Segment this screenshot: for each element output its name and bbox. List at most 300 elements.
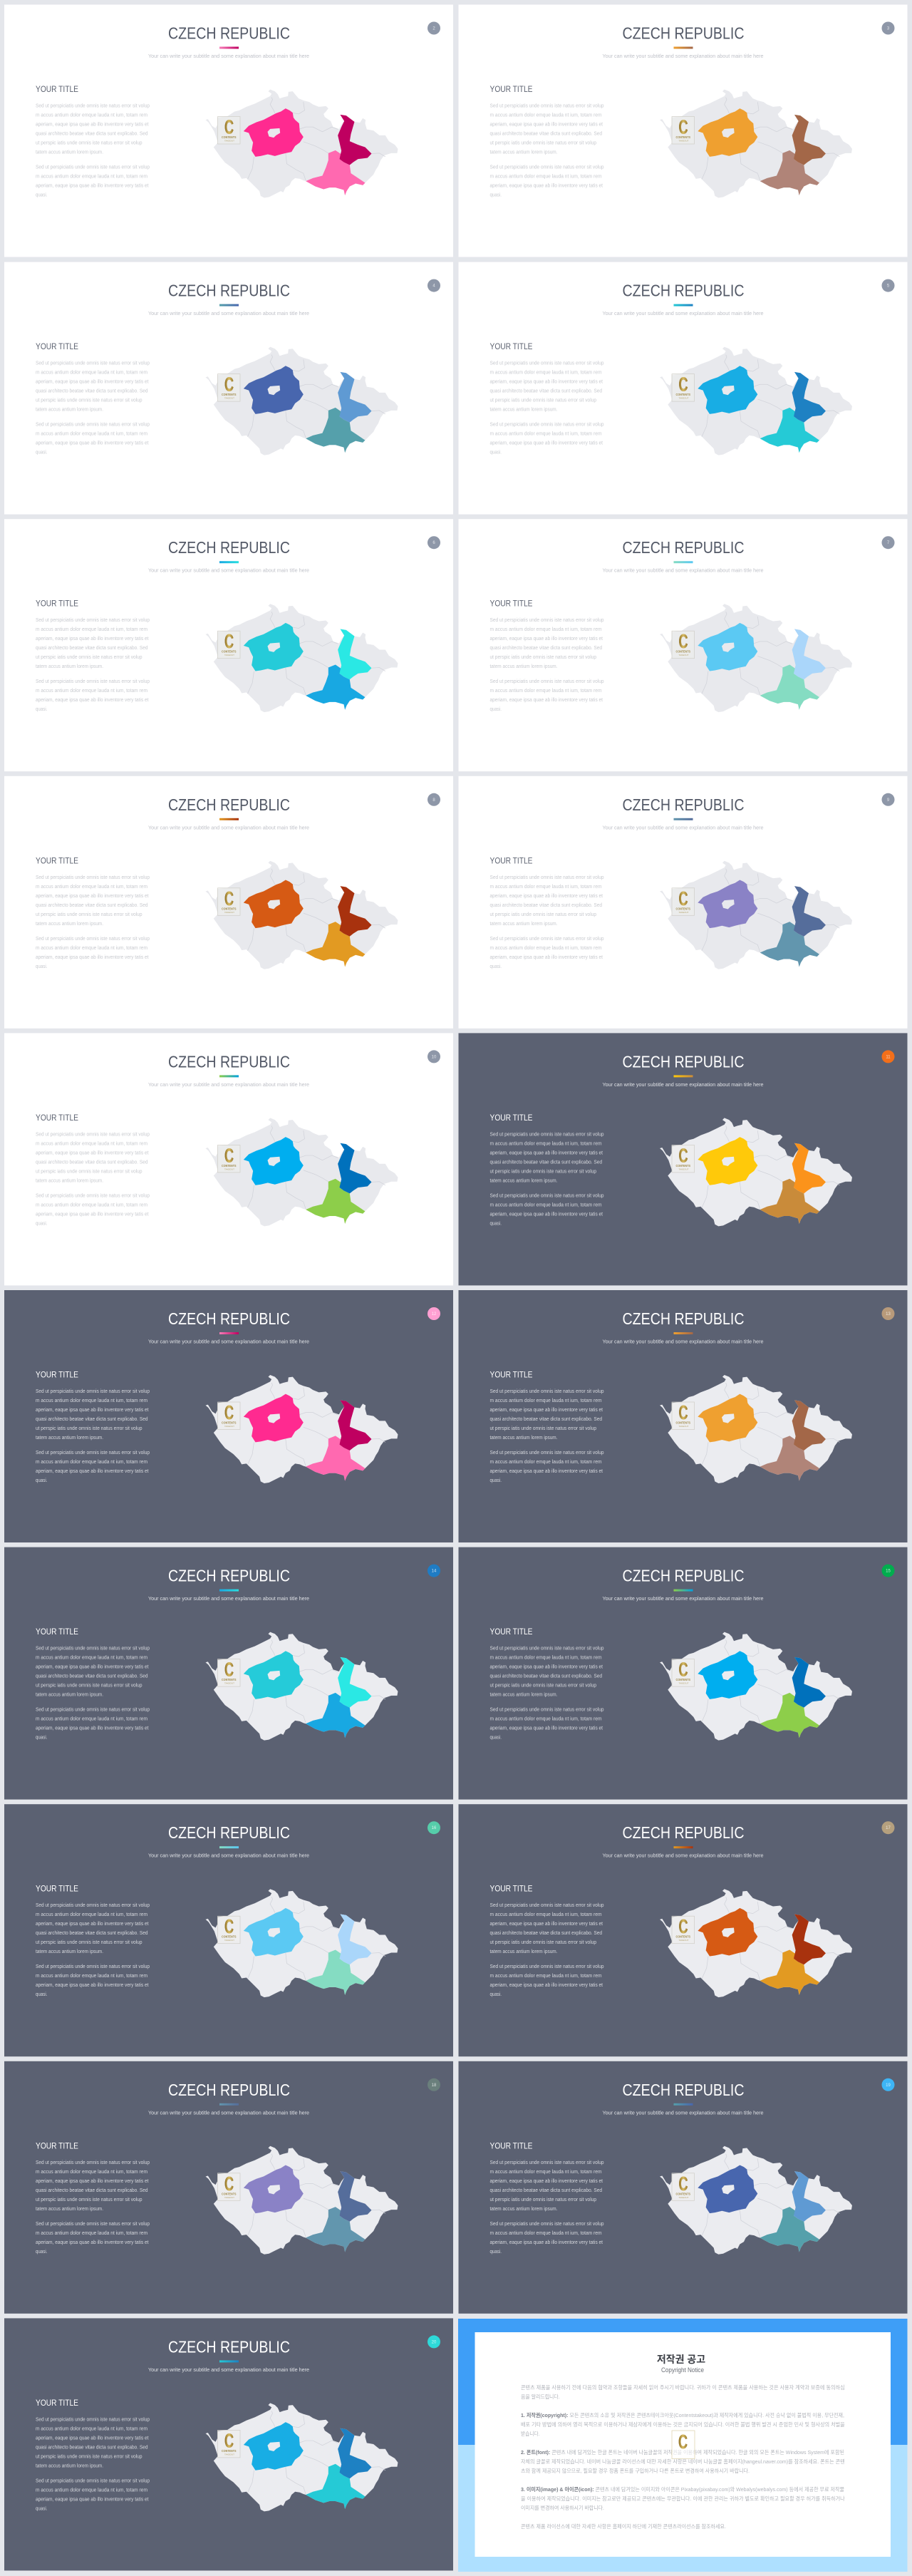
panel: slide 1 pink bbox=[4, 4, 453, 257]
title underline bbox=[219, 1332, 239, 1334]
body text: quasi architecto beatae vitae dicta sunt explicabo. Sed bbox=[36, 1160, 148, 1165]
logo bbox=[218, 1401, 240, 1430]
body text: quasi. bbox=[36, 1992, 48, 1997]
page number badge: 3 bbox=[887, 27, 890, 31]
logo: C bbox=[224, 630, 234, 652]
body text: tatem accus antium lorem ipsum. bbox=[490, 2207, 558, 2212]
body text: Sed ut perspiciatis unde omnis iste natus error sit volup bbox=[36, 618, 150, 623]
body text: quasi. bbox=[36, 2506, 48, 2511]
subtitle: Your can write your subtitle and some explanation about main title here bbox=[148, 53, 309, 59]
page number badge: 8 bbox=[432, 798, 435, 803]
logo: CONTENTS bbox=[675, 650, 690, 654]
body text: Sed ut perspiciatis unde omnis iste natus error sit volup bbox=[490, 361, 604, 366]
title underline bbox=[219, 561, 239, 563]
body text: aperiam, eaque ipsa quae ab illo inventore very tatis et bbox=[36, 1150, 149, 1155]
map bbox=[205, 2403, 398, 2511]
body text: tatem accus antium lorem ipsum. bbox=[36, 2463, 103, 2468]
body text bbox=[490, 1389, 604, 1483]
logo: TAKEOUT bbox=[678, 1939, 689, 1942]
heading: YOUR TITLE bbox=[490, 1885, 533, 1894]
body text: aperiam, eaque ipsa quae ab illo inventore very tatis et bbox=[490, 1726, 603, 1731]
body text: Sed ut perspiciatis unde omnis iste natus error sit volup bbox=[36, 2222, 150, 2227]
subtitle: Your can write your subtitle and some explanation about main title here bbox=[148, 310, 309, 316]
page number badge bbox=[882, 1821, 895, 1834]
logo bbox=[672, 2173, 694, 2200]
title: CZECH REPUBLIC bbox=[168, 538, 290, 557]
logo: TAKEOUT bbox=[224, 1425, 234, 1428]
logo: C bbox=[678, 887, 688, 910]
body text: quasi architecto beatae vitae dicta sunt explicabo. Sed bbox=[36, 1931, 148, 1936]
body text: Sed ut perspiciatis unde omnis iste natus error sit volup bbox=[490, 618, 604, 623]
heading: YOUR TITLE bbox=[36, 600, 78, 609]
body text: m accus antium dolor emque lauda nt ium, totam rem bbox=[36, 2170, 147, 2175]
body text: tatem accus antium lorem ipsum. bbox=[490, 408, 558, 413]
body text: aperiam, eaque ipsa quae ab illo inventore very tatis et bbox=[36, 441, 149, 446]
logo bbox=[672, 1144, 694, 1173]
body text: Sed ut perspiciatis unde omnis iste natus error sit volup bbox=[36, 2478, 150, 2483]
body text: quasi. bbox=[490, 964, 502, 969]
title: CZECH REPUBLIC bbox=[623, 1309, 745, 1328]
body text: quasi architecto beatae vitae dicta sunt explicabo. Sed bbox=[490, 1160, 602, 1165]
page number badge bbox=[882, 536, 895, 549]
body text: m accus antium dolor emque lauda nt ium, totam rem bbox=[490, 2231, 602, 2236]
body text: ut perspic iatis unde omnis iste natus error sit volup bbox=[490, 912, 596, 917]
logo: TAKEOUT bbox=[678, 397, 689, 400]
body text: aperiam, eaque ipsa quae ab illo inventore very tatis et bbox=[490, 2179, 603, 2184]
page number badge bbox=[428, 1050, 440, 1063]
body text: m accus antium dolor emque lauda nt ium, totam rem bbox=[36, 1398, 147, 1403]
map bbox=[660, 1118, 852, 1226]
logo: CONTENTS bbox=[675, 1935, 690, 1939]
body text: Sed ut perspiciatis unde omnis iste natus error sit volup bbox=[490, 1389, 604, 1394]
body text: quasi. bbox=[490, 192, 502, 198]
heading: YOUR TITLE bbox=[36, 1371, 78, 1380]
subtitle: Your can write your subtitle and some explanation about main title here bbox=[603, 824, 764, 830]
map bbox=[205, 1118, 398, 1226]
logo: CONTENTS bbox=[222, 1421, 237, 1424]
body text: quasi architecto beatae vitae dicta sunt explicabo. Sed bbox=[36, 1674, 148, 1679]
body text: Sed ut perspiciatis unde omnis iste natus error sit volup bbox=[36, 2417, 150, 2422]
subtitle: Your can write your subtitle and some explanation about main title here bbox=[603, 1339, 764, 1344]
body text: aperiam, eaque ipsa quae ab illo inventore very tatis et bbox=[36, 2240, 149, 2245]
logo: CONTENTS bbox=[675, 907, 690, 910]
body text bbox=[36, 1647, 150, 1741]
notice body text: 받습니다. bbox=[521, 2431, 540, 2437]
subtitle: Your can write your subtitle and some explanation about main title here bbox=[148, 1081, 309, 1088]
body text: Sed ut perspiciatis unde omnis iste natus error sit volup bbox=[490, 875, 604, 880]
title: CZECH REPUBLIC bbox=[168, 1567, 290, 1585]
body text: quasi architecto beatae vitae dicta sunt explicabo. Sed bbox=[490, 1931, 602, 1936]
panel: slide 18 dark blue bbox=[459, 2061, 908, 2314]
title underline bbox=[674, 561, 693, 563]
title underline bbox=[219, 1075, 239, 1077]
logo bbox=[672, 2431, 695, 2459]
subtitle: Your can write your subtitle and some explanation about main title here bbox=[603, 2109, 764, 2116]
body text: Sed ut perspiciatis unde omnis iste natus error sit volup bbox=[36, 165, 150, 170]
map bbox=[660, 1375, 852, 1483]
notice body text: 2. 폰트(font): 콘텐츠 내에 담겨있는 한글 폰트는 네이버 나눔글꼴의 저작권을 이용하여 제작되었습니다. 한글 외의 모든 폰트는 Windows System에 포함된 bbox=[521, 2449, 844, 2456]
body text bbox=[36, 104, 150, 198]
page number badge: 2 bbox=[432, 27, 435, 31]
body text bbox=[36, 875, 150, 969]
logo: TAKEOUT bbox=[224, 2196, 234, 2199]
body text: m accus antium dolor emque lauda nt ium, totam rem bbox=[36, 113, 147, 118]
logo: CONTENTS bbox=[675, 1164, 690, 1168]
body text bbox=[490, 618, 604, 712]
panel: slide 13 dark turquoise bbox=[4, 1547, 453, 1800]
body text: quasi architecto beatae vitae dicta sunt explicabo. Sed bbox=[490, 1674, 602, 1679]
title underline bbox=[674, 1075, 693, 1077]
page number badge bbox=[428, 1307, 440, 1320]
body text: aperiam, eaque ipsa quae ab illo inventore very tatis et bbox=[490, 1983, 603, 1988]
body text bbox=[36, 2160, 150, 2255]
logo: CONTENTS bbox=[675, 2192, 690, 2195]
logo: TAKEOUT bbox=[224, 140, 234, 143]
logo: C bbox=[678, 1915, 688, 1937]
heading: YOUR TITLE bbox=[36, 857, 78, 865]
page number badge bbox=[882, 279, 895, 292]
logo bbox=[672, 373, 694, 401]
logo: C bbox=[224, 1144, 234, 1166]
page number badge: 10 bbox=[432, 1055, 437, 1059]
logo: TAKEOUT bbox=[224, 654, 234, 656]
body text: quasi. bbox=[36, 964, 48, 969]
body text: m accus antium dolor emque lauda nt ium, totam rem bbox=[490, 1398, 602, 1403]
body text: tatem accus antium lorem ipsum. bbox=[36, 1693, 103, 1698]
body text: quasi. bbox=[490, 1992, 502, 1997]
panel: slide 3 blue bbox=[4, 262, 453, 515]
map bbox=[660, 2146, 852, 2255]
logo: CONTENTS bbox=[222, 907, 237, 910]
page number badge: 6 bbox=[432, 541, 435, 545]
notice body text: 배포 기타 방법에 의하여 영리 목적으로 이용하거나 제삼자에게 이용하는 것은 금지되어 있습니다. 이러한 불법 행위 발견 시 준엄한 민사 및 형사상의 처벌을 bbox=[521, 2421, 845, 2428]
page number badge: 12 bbox=[432, 1312, 437, 1317]
panel: slide 17 dark violet bbox=[4, 2061, 453, 2314]
subtitle: Your can write your subtitle and some explanation about main title here bbox=[148, 824, 309, 830]
body text: Sed ut perspiciatis unde omnis iste natus error sit volup bbox=[36, 1708, 150, 1713]
logo bbox=[218, 1659, 240, 1686]
body text: m accus antium dolor emque lauda nt ium, totam rem bbox=[36, 2426, 147, 2431]
notice title: 저작권 공고 bbox=[657, 2354, 705, 2365]
body text: m accus antium dolor emque lauda nt ium, totam rem bbox=[36, 2488, 147, 2493]
logo: CONTENTS bbox=[222, 650, 237, 654]
body text: aperiam, eaque ipsa quae ab illo inventore very tatis et bbox=[490, 380, 603, 385]
body text: tatem accus antium lorem ipsum. bbox=[36, 408, 103, 413]
title underline bbox=[674, 304, 693, 306]
page number badge: 13 bbox=[886, 1312, 891, 1317]
body text: Sed ut perspiciatis unde omnis iste natus error sit volup bbox=[490, 2160, 604, 2165]
title: CZECH REPUBLIC bbox=[168, 2081, 290, 2099]
page number badge bbox=[428, 2335, 440, 2348]
body text: m accus antium dolor emque lauda nt ium, totam rem bbox=[490, 1717, 602, 1722]
body text: aperiam, eaque ipsa quae ab illo inventore very tatis et bbox=[36, 1922, 149, 1927]
body text: ut perspic iatis unde omnis iste natus error sit volup bbox=[490, 655, 596, 660]
body text: quasi. bbox=[36, 1221, 48, 1226]
logo bbox=[218, 2429, 240, 2458]
logo bbox=[672, 630, 694, 659]
body text: tatem accus antium lorem ipsum. bbox=[36, 1178, 103, 1183]
title underline bbox=[674, 1846, 693, 1848]
panel: slide 4 sky blue bbox=[459, 262, 908, 515]
body text: quasi architecto beatae vitae dicta sunt explicabo. Sed bbox=[36, 903, 148, 908]
body text: quasi. bbox=[490, 707, 502, 712]
body text: aperiam, eaque ipsa quae ab illo inventore very tatis et bbox=[490, 1212, 603, 1217]
body text bbox=[36, 1132, 150, 1226]
body text: aperiam, eaque ipsa quae ab illo inventore very tatis et bbox=[490, 698, 603, 703]
map bbox=[660, 89, 852, 197]
body text bbox=[490, 1647, 604, 1741]
title underline bbox=[219, 47, 239, 48]
map bbox=[660, 604, 852, 712]
logo: TAKEOUT bbox=[224, 2453, 234, 2456]
logo bbox=[672, 887, 694, 915]
body text: quasi. bbox=[490, 1478, 502, 1483]
map bbox=[205, 347, 398, 455]
page number badge: 17 bbox=[886, 1826, 891, 1830]
page number badge: 19 bbox=[886, 2083, 891, 2088]
title underline bbox=[219, 2360, 239, 2362]
body text: quasi architecto beatae vitae dicta sunt explicabo. Sed bbox=[36, 1417, 148, 1422]
body text: m accus antium dolor emque lauda nt ium, totam rem bbox=[36, 1202, 147, 1207]
body text: quasi. bbox=[36, 1478, 48, 1483]
body text: aperiam, eaque ipsa quae ab illo inventore very tatis et bbox=[490, 1408, 603, 1413]
body text: ut perspic iatis unde omnis iste natus error sit volup bbox=[490, 1684, 596, 1689]
body text: quasi. bbox=[36, 1736, 48, 1741]
body text: Sed ut perspiciatis unde omnis iste natus error sit volup bbox=[490, 423, 604, 428]
title underline bbox=[219, 304, 239, 306]
body text: Sed ut perspiciatis unde omnis iste natus error sit volup bbox=[36, 1964, 150, 1969]
body text: Sed ut perspiciatis unde omnis iste natus error sit volup bbox=[490, 104, 604, 108]
body text: ut perspic iatis unde omnis iste natus error sit volup bbox=[36, 2198, 142, 2203]
title underline bbox=[219, 1846, 239, 1848]
map bbox=[205, 1889, 398, 1997]
body text: aperiam, eaque ipsa quae ab illo inventore very tatis et bbox=[490, 1150, 603, 1155]
body text: tatem accus antium lorem ipsum. bbox=[490, 1178, 558, 1183]
logo: TAKEOUT bbox=[678, 1682, 689, 1685]
heading: YOUR TITLE bbox=[490, 1628, 533, 1637]
body text: aperiam, eaque ipsa quae ab illo inventore very tatis et bbox=[490, 894, 603, 899]
subtitle: Your can write your subtitle and some explanation about main title here bbox=[603, 310, 764, 316]
body text: m accus antium dolor emque lauda nt ium, totam rem bbox=[36, 946, 147, 951]
logo: TAKEOUT bbox=[224, 397, 234, 400]
heading: YOUR TITLE bbox=[36, 1114, 78, 1123]
logo bbox=[672, 1915, 694, 1944]
body text: ut perspic iatis unde omnis iste natus error sit volup bbox=[36, 2454, 142, 2459]
logo: C bbox=[224, 1915, 234, 1937]
logo: TAKEOUT bbox=[678, 654, 689, 656]
subtitle: Your can write your subtitle and some explanation about main title here bbox=[603, 1853, 764, 1859]
page number badge bbox=[882, 1565, 895, 1577]
map bbox=[205, 2146, 398, 2255]
page number badge bbox=[428, 2078, 440, 2091]
subtitle: Your can write your subtitle and some explanation about main title here bbox=[148, 2109, 309, 2116]
page number badge: 16 bbox=[432, 1826, 437, 1830]
notice body text: 콘텐츠 제품 라이선스에 대한 자세한 사항은 홈페이지 하단에 기재한 콘텐츠라이선스를 참조하세요. bbox=[521, 2523, 726, 2530]
subtitle: Your can write your subtitle and some explanation about main title here bbox=[603, 1081, 764, 1088]
map bbox=[660, 347, 852, 455]
logo: TAKEOUT bbox=[224, 1168, 234, 1170]
heading: YOUR TITLE bbox=[490, 86, 533, 94]
body text bbox=[490, 1903, 604, 1997]
body text: aperiam, eaque ipsa quae ab illo inventore very tatis et bbox=[36, 380, 149, 385]
body text: ut perspic iatis unde omnis iste natus error sit volup bbox=[36, 912, 142, 917]
panel: slide 10 dark yellow bbox=[459, 1033, 908, 1285]
body text: quasi architecto beatae vitae dicta sunt explicabo. Sed bbox=[36, 2188, 148, 2193]
heading: YOUR TITLE bbox=[36, 1885, 78, 1894]
body text: m accus antium dolor emque lauda nt ium, totam rem bbox=[490, 174, 602, 180]
logo: C bbox=[678, 2173, 688, 2195]
body text: aperiam, eaque ipsa quae ab illo inventore very tatis et bbox=[36, 698, 149, 703]
body text: Sed ut perspiciatis unde omnis iste natus error sit volup bbox=[36, 423, 150, 428]
title: CZECH REPUBLIC bbox=[623, 795, 745, 814]
body text: ut perspic iatis unde omnis iste natus error sit volup bbox=[36, 1940, 142, 1945]
page number badge bbox=[428, 793, 440, 806]
title: CZECH REPUBLIC bbox=[623, 282, 745, 300]
page number badge bbox=[428, 536, 440, 549]
body text: m accus antium dolor emque lauda nt ium, totam rem bbox=[36, 2231, 147, 2236]
body text: Sed ut perspiciatis unde omnis iste natus error sit volup bbox=[490, 1647, 604, 1652]
body text: tatem accus antium lorem ipsum. bbox=[36, 1949, 103, 1954]
body text: m accus antium dolor emque lauda nt ium, totam rem bbox=[36, 432, 147, 437]
notice body text: 1. 저작권(copyright): 모든 콘텐츠의 소유 및 저작권은 콘텐츠테이크아웃(Contentstakeout)과 제작자에게 있습니다. 사전 승낙 없이 불법적 이용, 무단전재, bbox=[521, 2412, 844, 2418]
title underline bbox=[674, 818, 693, 820]
body text bbox=[490, 361, 604, 455]
subtitle: Your can write your subtitle and some explanation about main title here bbox=[603, 567, 764, 574]
body text: Sed ut perspiciatis unde omnis iste natus error sit volup bbox=[36, 1647, 150, 1652]
map bbox=[660, 861, 852, 969]
title: CZECH REPUBLIC bbox=[623, 1052, 745, 1071]
body text: Sed ut perspiciatis unde omnis iste natus error sit volup bbox=[490, 1903, 604, 1908]
body text: m accus antium dolor emque lauda nt ium, totam rem bbox=[36, 1656, 147, 1661]
body text: m accus antium dolor emque lauda nt ium, totam rem bbox=[490, 432, 602, 437]
panel: slide 15 dark pastel bbox=[4, 1804, 453, 2056]
body text: m accus antium dolor emque lauda nt ium, totam rem bbox=[490, 1656, 602, 1661]
body text bbox=[490, 2160, 604, 2255]
logo bbox=[672, 1659, 694, 1686]
panel: slide 2 orange bbox=[459, 4, 908, 257]
body text: tatem accus antium lorem ipsum. bbox=[490, 922, 558, 927]
logo: TAKEOUT bbox=[224, 911, 234, 914]
body text: quasi. bbox=[36, 450, 48, 455]
body text: m accus antium dolor emque lauda nt ium, totam rem bbox=[490, 946, 602, 951]
body text: aperiam, eaque ipsa quae ab illo inventore very tatis et bbox=[36, 1665, 149, 1670]
body text: tatem accus antium lorem ipsum. bbox=[36, 150, 103, 155]
body text: m accus antium dolor emque lauda nt ium, totam rem bbox=[36, 689, 147, 694]
logo: C bbox=[224, 1659, 234, 1681]
title: CZECH REPUBLIC bbox=[168, 282, 290, 300]
page number badge bbox=[428, 1821, 440, 1834]
panel: slide 7 rust bbox=[4, 776, 453, 1029]
body text: Sed ut perspiciatis unde omnis iste natus error sit volup bbox=[36, 104, 150, 108]
body text: aperiam, eaque ipsa quae ab illo inventore very tatis et bbox=[490, 123, 603, 127]
page number badge: 7 bbox=[887, 541, 890, 545]
logo: CONTENTS bbox=[222, 2192, 237, 2195]
body text: quasi architecto beatae vitae dicta sunt explicabo. Sed bbox=[490, 646, 602, 651]
body text: Sed ut perspiciatis unde omnis iste natus error sit volup bbox=[36, 1903, 150, 1908]
logo: C bbox=[224, 373, 234, 396]
logo: C bbox=[224, 887, 234, 910]
page number badge: 20 bbox=[432, 2340, 437, 2344]
logo: CONTENTS bbox=[675, 1678, 690, 1681]
notice body text: 자체의 글꼴로 제작되었습니다. 네이버 나눔글꼴 라이선스에 대한 자세한 사항은 네이버 나눔글꼴 홈페이지(hangeul.naver.com)를 참조하세요. 폰트는 콘텐 bbox=[521, 2458, 845, 2465]
body text: aperiam, eaque ipsa quae ab illo inventore very tatis et bbox=[490, 955, 603, 960]
body text: m accus antium dolor emque lauda nt ium, totam rem bbox=[490, 371, 602, 376]
heading: YOUR TITLE bbox=[490, 857, 533, 865]
panel: slide 12 dark orange bbox=[459, 1290, 908, 1542]
body text: aperiam, eaque ipsa quae ab illo inventore very tatis et bbox=[36, 2497, 149, 2502]
notice body text: 음을 알리드립니다. bbox=[521, 2394, 560, 2400]
heading: YOUR TITLE bbox=[490, 2142, 533, 2150]
body text: quasi. bbox=[490, 450, 502, 455]
title underline bbox=[219, 1590, 239, 1592]
body text: ut perspic iatis unde omnis iste natus error sit volup bbox=[36, 655, 142, 660]
logo: C bbox=[678, 1401, 688, 1423]
notice subtitle: Copyright Notice bbox=[661, 2366, 704, 2374]
logo: TAKEOUT bbox=[678, 140, 689, 143]
body text: quasi architecto beatae vitae dicta sunt explicabo. Sed bbox=[490, 389, 602, 394]
body text: aperiam, eaque ipsa quae ab illo inventore very tatis et bbox=[36, 1469, 149, 1474]
logo: CONTENTS bbox=[675, 393, 690, 396]
logo: TAKEOUT bbox=[224, 1682, 234, 1685]
title underline bbox=[674, 1332, 693, 1334]
logo: CONTENTS bbox=[222, 1678, 237, 1681]
panel: slide 19 dark sky blue bbox=[4, 2318, 453, 2570]
body text: quasi architecto beatae vitae dicta sunt explicabo. Sed bbox=[490, 131, 602, 137]
body text: tatem accus antium lorem ipsum. bbox=[490, 1949, 558, 1954]
logo: C bbox=[678, 373, 688, 396]
logo bbox=[218, 887, 240, 915]
notice body text bbox=[521, 2384, 845, 2530]
title: CZECH REPUBLIC bbox=[623, 24, 745, 43]
title: CZECH REPUBLIC bbox=[623, 1567, 745, 1585]
page number badge bbox=[882, 1307, 895, 1320]
notice body text: 츠와 함께 제공되지 않으므로, 필요할 경우 정품 폰트를 구입하거나 다른 폰트로 변경하여 사용하시기 바랍니다. bbox=[521, 2468, 750, 2474]
logo: TAKEOUT bbox=[678, 2196, 689, 2199]
title: CZECH REPUBLIC bbox=[168, 1823, 290, 1842]
body text: quasi architecto beatae vitae dicta sunt explicabo. Sed bbox=[490, 2188, 602, 2193]
body text: aperiam, eaque ipsa quae ab illo inventore very tatis et bbox=[36, 894, 149, 899]
body text: m accus antium dolor emque lauda nt ium, totam rem bbox=[36, 627, 147, 632]
body text: aperiam, eaque ipsa quae ab illo inventore very tatis et bbox=[36, 2179, 149, 2184]
logo: C bbox=[678, 115, 688, 138]
page number badge: 14 bbox=[432, 1570, 437, 1574]
body text: Sed ut perspiciatis unde omnis iste natus error sit volup bbox=[36, 2160, 150, 2165]
heading: YOUR TITLE bbox=[490, 600, 533, 609]
page number badge bbox=[428, 21, 440, 34]
panel: slide 6 pastel bbox=[459, 519, 908, 771]
notice body text: 을 이용하여 제작되었습니다. 이미지는 참고로만 제공되고 콘텐츠에는 무관합니다. 이에 관한 관리는 귀하가 별도로 확인하고 필요할 경우 허가를 취득하거나 bbox=[521, 2495, 845, 2502]
body text: tatem accus antium lorem ipsum. bbox=[36, 922, 103, 927]
logo: CONTENTS bbox=[675, 135, 690, 139]
logo bbox=[672, 115, 694, 144]
body text: aperiam, eaque ipsa quae ab illo inventore very tatis et bbox=[36, 2436, 149, 2441]
title: CZECH REPUBLIC bbox=[168, 2337, 290, 2356]
subtitle: Your can write your subtitle and some explanation about main title here bbox=[148, 1853, 309, 1859]
title: CZECH REPUBLIC bbox=[623, 538, 745, 557]
body text: quasi architecto beatae vitae dicta sunt explicabo. Sed bbox=[36, 389, 148, 394]
body text: aperiam, eaque ipsa quae ab illo inventore very tatis et bbox=[36, 637, 149, 642]
notice body text: 3. 이미지(image) & 아이콘(icon): 콘텐츠 내에 담겨있는 이미지와 아이콘은 Pixabay(pixabay.com)와 Webalys(webalys.com) 등에서 제공한 무료 저작물 bbox=[521, 2486, 844, 2493]
page number badge bbox=[428, 1565, 440, 1577]
body text: Sed ut perspiciatis unde omnis iste natus error sit volup bbox=[36, 1389, 150, 1394]
logo bbox=[218, 373, 240, 401]
body text: quasi. bbox=[36, 192, 48, 198]
body text: Sed ut perspiciatis unde omnis iste natus error sit volup bbox=[490, 2222, 604, 2227]
subtitle: Your can write your subtitle and some explanation about main title here bbox=[148, 1595, 309, 1602]
title: CZECH REPUBLIC bbox=[168, 1052, 290, 1071]
body text: tatem accus antium lorem ipsum. bbox=[490, 1693, 558, 1698]
body text: m accus antium dolor emque lauda nt ium, totam rem bbox=[490, 627, 602, 632]
